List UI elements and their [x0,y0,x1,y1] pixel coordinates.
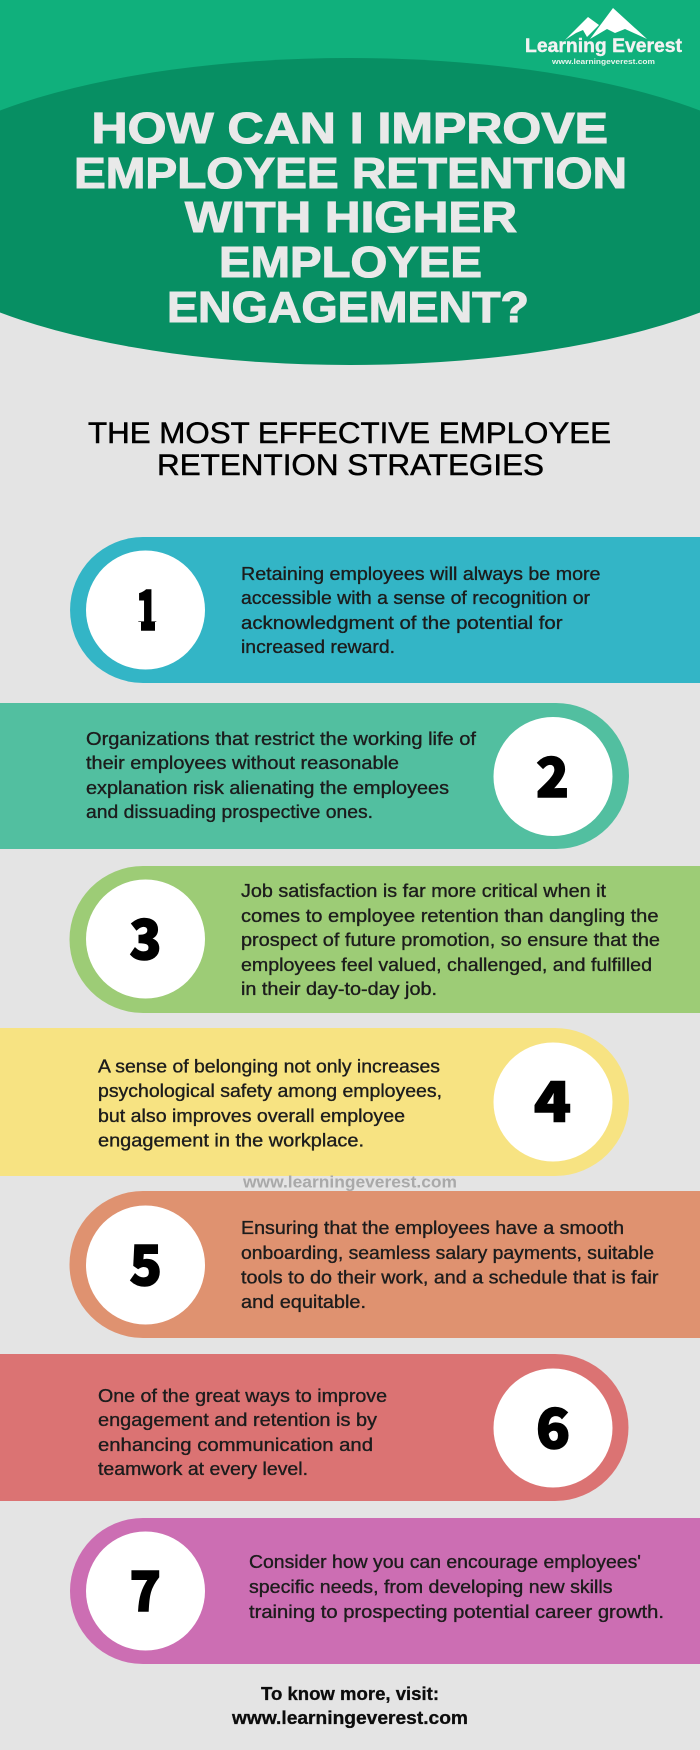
text 1: acknowledgment of the potential for [241,613,562,633]
panel: strategy 7 [70,1518,700,1664]
number 1: 1 [136,566,158,646]
title: EMPLOYEE [219,239,482,287]
text 4: engagement in the workplace. [98,1130,364,1150]
logo: Learning Everest [525,8,683,66]
text 3: Job satisfaction is far more critical when it [241,881,606,901]
band 3 [70,866,700,1013]
text 3: comes to employee retention than dangling the [241,906,658,926]
subheading [88,417,611,482]
title: HOW CAN I IMPROVE [92,105,608,153]
number 3: 3 [130,895,162,975]
number circle 3 [86,880,205,998]
footer call to action: www.learningeverest.com [231,1707,468,1728]
header background [0,0,700,212]
band 2 [0,703,629,849]
text 1 [241,564,600,657]
text 3: in their day-to-day job. [241,979,437,999]
band 1 [70,537,700,683]
subheading: RETENTION STRATEGIES [157,449,544,482]
text 3: prospect of future promotion, so ensure that the [241,930,660,950]
text 6: teamwork at every level. [98,1459,308,1479]
text 7 [249,1552,664,1622]
text 6: engagement and retention is by [98,1410,378,1430]
panel: strategy 6 [0,1354,628,1501]
footer call to action [231,1683,468,1728]
text 3 [241,881,660,999]
text 5: and equitable. [241,1292,366,1312]
text 5: onboarding, seamless salary payments, suitable [241,1243,654,1263]
number 4: 4 [534,1058,571,1138]
text 1: Retaining employees will always be more [241,564,600,584]
number circle 4 [494,1042,612,1162]
number circle 6 [494,1368,612,1488]
title: EMPLOYEE RETENTION [74,150,627,198]
text 7: specific needs, from developing new skills [249,1577,612,1597]
text 2: and dissuading prospective ones. [86,802,373,822]
number circle 2 [494,717,612,836]
number 7: 7 [130,1547,161,1627]
text 5 [241,1218,658,1312]
panel: strategy 5 [70,1191,700,1338]
text 6: One of the great ways to improve [98,1386,387,1406]
number circle 7 [86,1532,205,1650]
footer call to action: To know more, visit: [261,1683,439,1704]
header ellipse [0,58,700,365]
text 4: psychological safety among employees, [98,1081,442,1101]
band 7 [70,1518,700,1664]
band 6 [0,1354,628,1501]
band 4 [0,1028,629,1176]
text 6: enhancing communication and [98,1435,373,1455]
number 2: 2 [536,733,569,813]
panel: strategy 2 [0,703,629,849]
logo name: Learning Everest [525,36,683,57]
number circle 1 [86,550,205,670]
text 7: training to prospecting potential career growth. [249,1602,664,1622]
title: WITH HIGHER [185,194,517,242]
text 6 [98,1386,387,1479]
number 5: 5 [130,1221,162,1301]
text 5: tools to do their work, and a schedule that is fair [241,1268,658,1288]
panel: strategy 3 [70,866,700,1013]
text 2: explanation risk alienating the employees [86,778,449,798]
text 2: their employees without reasonable [86,753,399,773]
text 7: Consider how you can encourage employees' [249,1552,641,1572]
subheading: THE MOST EFFECTIVE EMPLOYEE [88,417,611,450]
title [74,105,627,332]
text 2: Organizations that restrict the working life of [86,729,477,749]
text 4 [98,1056,442,1150]
title: ENGAGEMENT? [167,284,529,332]
number circle 5 [86,1206,205,1324]
text 3: employees feel valued, challenged, and fulfilled [241,955,652,975]
text 4: but also improves overall employee [98,1106,405,1126]
text 5: Ensuring that the employees have a smooth [241,1218,624,1238]
panel: strategy 4 [0,1028,629,1176]
text 2 [86,729,477,822]
watermark url: www.learningeverest.com [242,1174,457,1192]
logo url: www.learningeverest.com [551,57,655,66]
number 6: 6 [536,1384,570,1464]
text 1: increased reward. [241,637,395,657]
icon: mountains [565,8,647,40]
band 5 [70,1191,700,1338]
text 1: accessible with a sense of recognition or [241,588,590,608]
text 4: A sense of belonging not only increases [98,1056,440,1076]
panel: strategy 1 [70,537,700,683]
